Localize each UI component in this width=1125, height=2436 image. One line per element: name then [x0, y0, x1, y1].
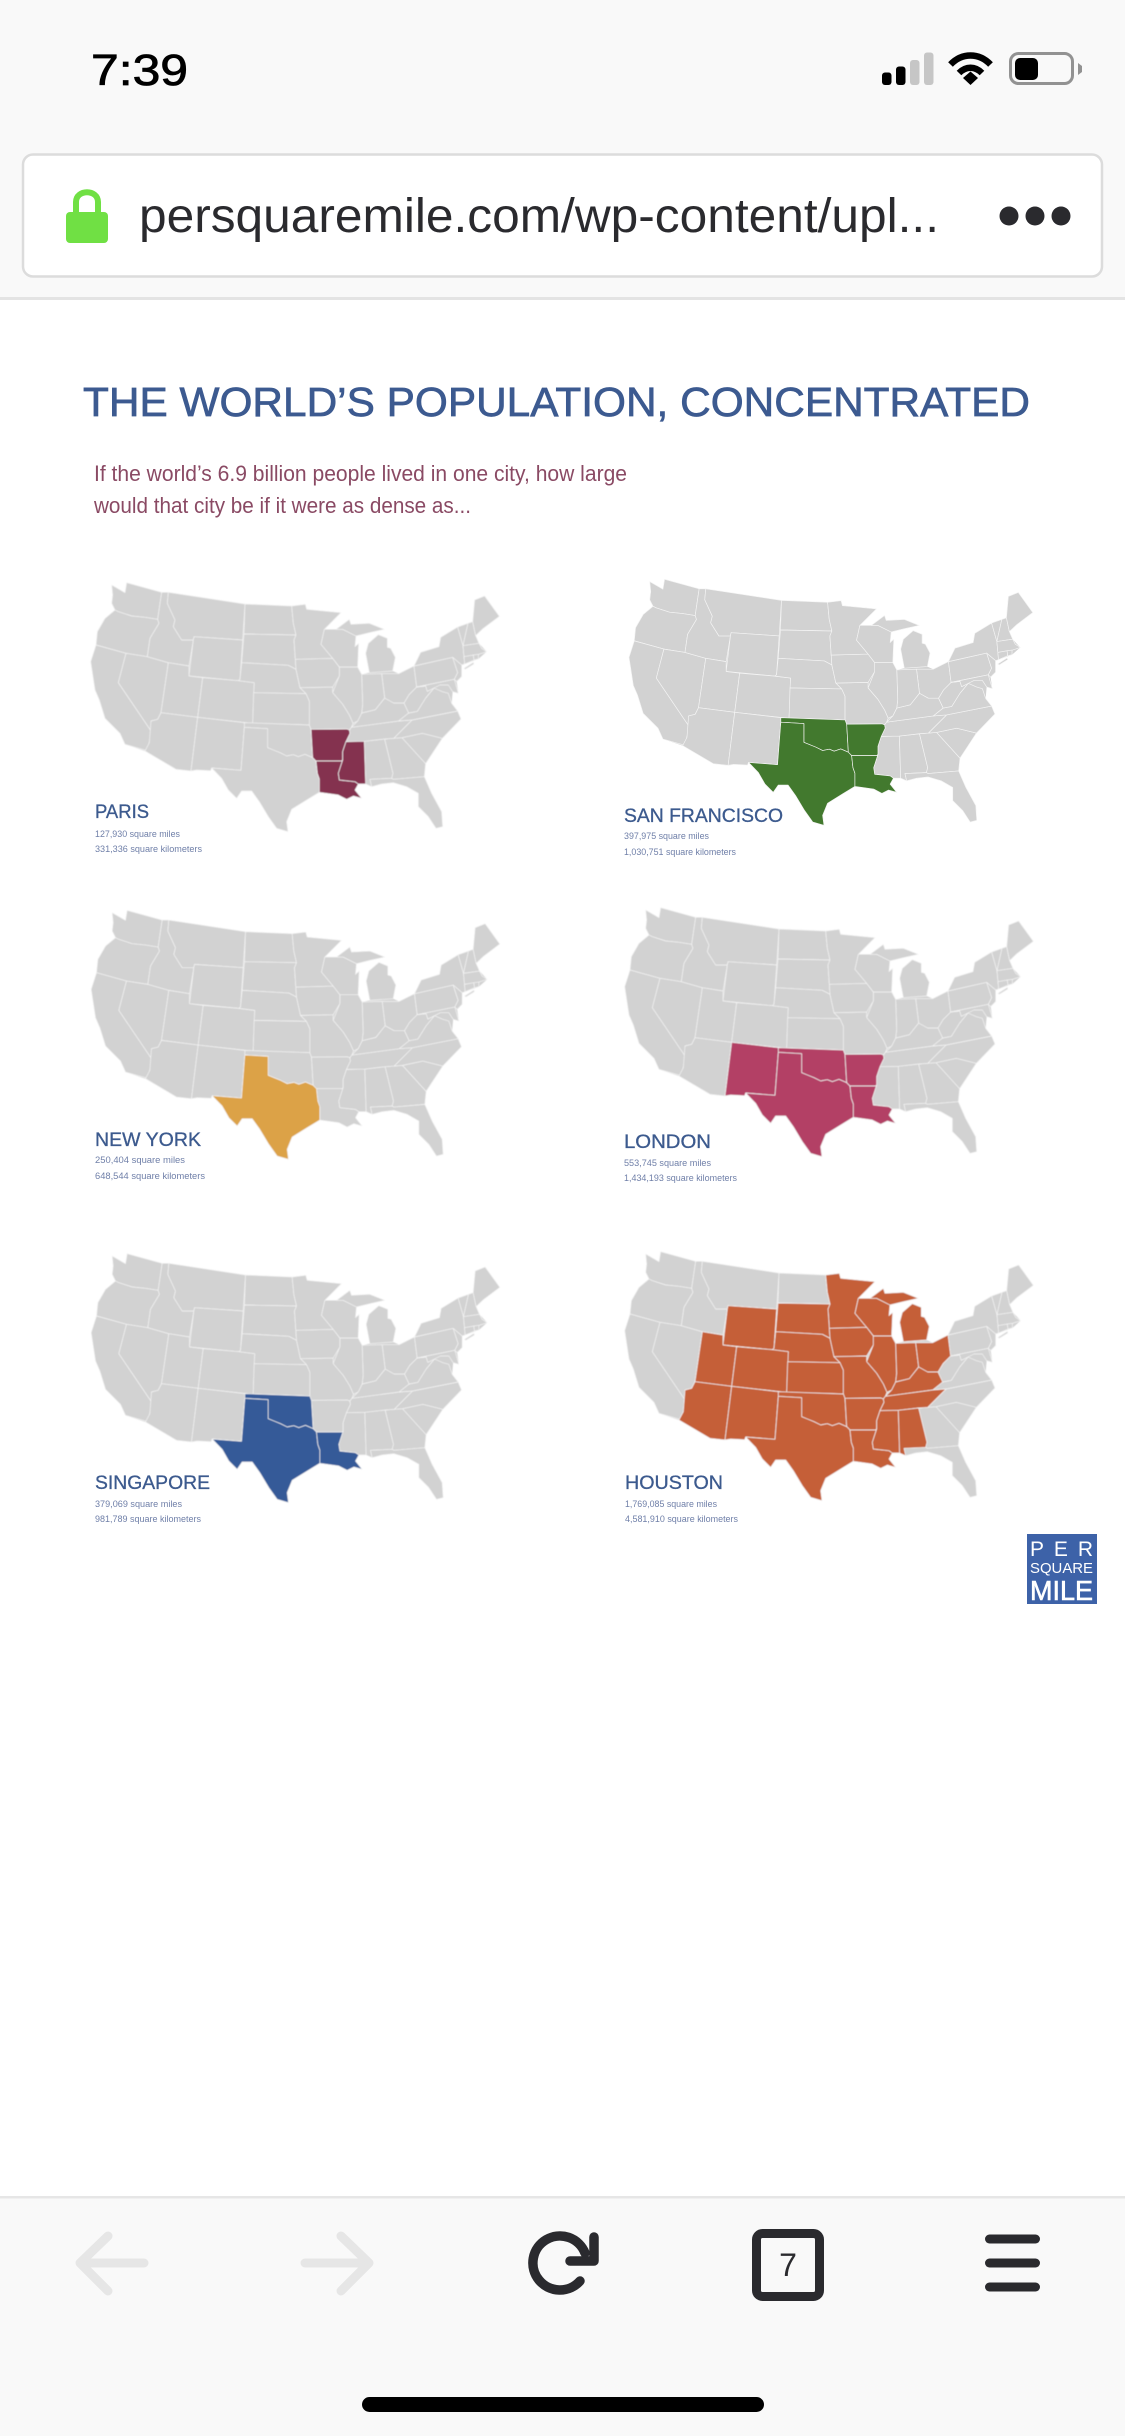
panel: New York — [91, 910, 500, 1181]
label: Singapore: 379,069 square miles — [95, 1499, 182, 1509]
label: Singapore: 981,789 square kilometers — [95, 1514, 201, 1524]
label: New York — [95, 1130, 206, 1181]
title: THE WORLD’S POPULATION, CONCENTRATED — [83, 379, 1030, 425]
label: Houston: 4,581,910 square kilometers — [625, 1514, 738, 1524]
label: London: LONDON — [624, 1132, 711, 1153]
icon: green padlock — [66, 192, 108, 243]
logo: Per Square Mile: SQUARE — [1030, 1560, 1093, 1577]
label: Paris: PARIS — [95, 802, 149, 823]
intro text — [93, 461, 627, 518]
label: Paris: 127,930 square miles — [95, 829, 180, 839]
map: London — [625, 908, 1033, 1157]
panel: Paris — [91, 583, 499, 854]
icon: battery — [1010, 54, 1082, 84]
label: New York: NEW YORK — [95, 1130, 201, 1151]
logo: Per Square Mile: PER — [1030, 1538, 1093, 1561]
map: Houston — [625, 1252, 1033, 1501]
label: London: 1,434,193 square kilometers — [624, 1173, 737, 1183]
label: Houston — [625, 1473, 738, 1524]
icon: wifi — [950, 56, 990, 85]
logo: Per Square Mile: MILE — [1030, 1575, 1093, 1606]
label: Singapore — [95, 1473, 210, 1524]
label: London — [624, 1132, 737, 1183]
label: New York: 648,544 square kilometers — [95, 1171, 206, 1181]
label: New York: 250,404 square miles — [95, 1155, 186, 1165]
url text: persquaremile.com/wp-content/upl... — [139, 190, 939, 243]
label: San Francisco: SAN FRANCISCO — [624, 806, 783, 827]
icon: back arrow — [80, 2236, 144, 2291]
address bar — [23, 154, 1102, 276]
intro text: If the world’s 6.9 billion people lived in one city, how large — [94, 461, 627, 486]
icon: tabs — [756, 2234, 820, 2296]
label: San Francisco — [624, 806, 783, 857]
icon: menu — [985, 2234, 1040, 2292]
label: Paris — [95, 802, 203, 854]
label: Paris: 331,336 square kilometers — [95, 844, 203, 854]
icon: tabs: 7 — [779, 2247, 797, 2283]
icon: cellular signal — [882, 52, 934, 85]
panel: London — [624, 908, 1033, 1183]
panel: Houston — [625, 1252, 1033, 1524]
home indicator — [362, 2397, 764, 2412]
browser bottom bar — [0, 2196, 1125, 2436]
label: London: 553,745 square miles — [624, 1158, 711, 1168]
browser top bar — [0, 0, 1125, 300]
icon: reload — [533, 2236, 594, 2290]
label: Houston: 1,769,085 square miles — [625, 1499, 717, 1509]
map: Singapore — [91, 1254, 500, 1503]
icon: forward arrow — [305, 2236, 369, 2291]
map: San Francisco — [629, 579, 1033, 825]
intro text: would that city be if it were as dense as... — [93, 493, 471, 518]
map: Paris — [91, 583, 499, 832]
panel: Singapore — [91, 1254, 500, 1524]
label: Houston: HOUSTON — [625, 1473, 723, 1494]
status bar clock: 7:39 — [91, 46, 188, 95]
logo: Per Square Mile — [1027, 1534, 1097, 1606]
label: San Francisco: 1,030,751 square kilometers — [624, 847, 736, 857]
label: Singapore: SINGAPORE — [95, 1473, 210, 1494]
label: San Francisco: 397,975 square miles — [624, 831, 709, 841]
icon: more dots — [1000, 206, 1070, 226]
panel: San Francisco — [624, 579, 1033, 857]
map: New York — [91, 910, 500, 1159]
